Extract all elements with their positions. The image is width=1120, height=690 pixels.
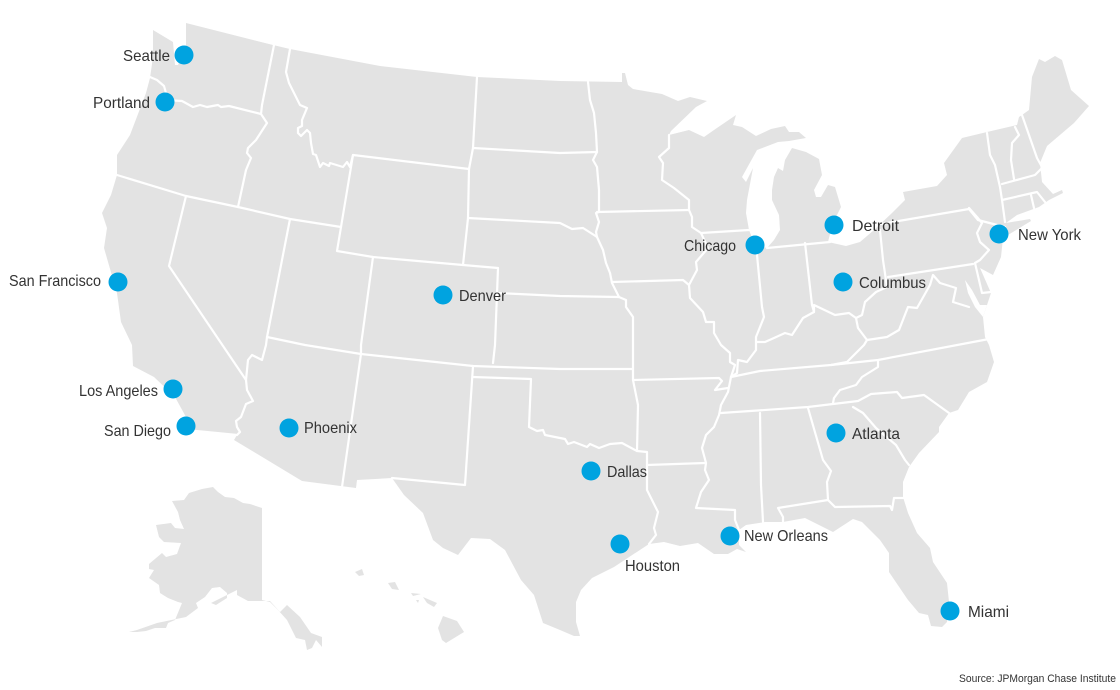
marker: Columbus <box>834 272 926 292</box>
marker: Dallas <box>582 462 647 481</box>
marker: Los Angeles: Los Angeles <box>79 383 158 400</box>
marker: Portland: Portland <box>93 95 150 112</box>
marker: Los Angeles <box>79 380 182 400</box>
marker: New York: New York <box>1018 227 1082 244</box>
marker: Chicago: Chicago <box>684 238 736 255</box>
marker: Detroit <box>824 216 900 235</box>
bay: Chesapeake <box>965 280 987 317</box>
marker: San Diego: San Diego <box>104 423 171 440</box>
marker: Detroit: Detroit <box>852 218 900 235</box>
marker: San Francisco: San Francisco <box>9 273 101 290</box>
marker: Denver: Denver <box>459 288 507 305</box>
marker: San Diego <box>104 416 196 440</box>
marker: Dallas: Dallas <box>607 464 647 481</box>
marker: Houston: Houston <box>625 558 680 575</box>
marker: Columbus: Columbus <box>859 275 926 292</box>
marker: Seattle <box>123 46 194 65</box>
land: contiguous US outline <box>102 23 1089 636</box>
marker: New York <box>990 224 1082 244</box>
marker: Phoenix: Phoenix <box>304 420 357 437</box>
map: Hawaii <box>355 569 464 643</box>
marker: Miami <box>940 602 1009 621</box>
marker: New Orleans: New Orleans <box>744 528 828 545</box>
marker: Atlanta <box>826 424 900 443</box>
marker: Houston <box>610 534 680 575</box>
marker: Denver <box>434 286 507 305</box>
marker: Seattle: Seattle <box>123 48 170 65</box>
map: contiguous United States <box>102 23 1089 636</box>
marker: Atlanta: Atlanta <box>852 426 900 443</box>
map: Alaska <box>129 487 322 650</box>
state borders <box>117 45 1045 544</box>
marker: New Orleans <box>720 526 828 546</box>
marker: Phoenix <box>280 418 357 438</box>
marker: Chicago <box>684 236 764 255</box>
marker: Portland <box>93 92 174 112</box>
marker: Miami: Miami <box>968 604 1009 621</box>
